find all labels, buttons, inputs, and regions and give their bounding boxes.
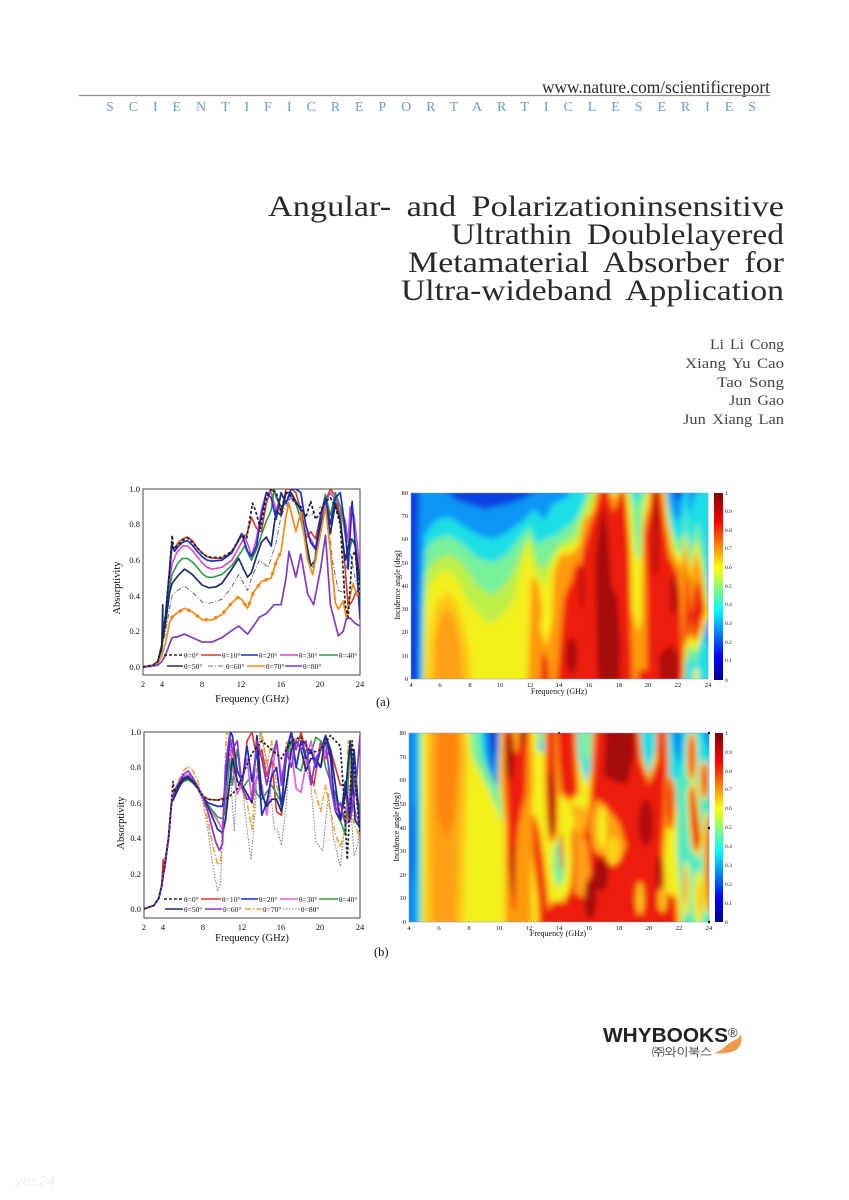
heatmap axis labels (b): Frequency (GHz) [530, 929, 586, 938]
axis labels (a): 8 [200, 679, 204, 689]
colorbar (b): 0.9 [725, 750, 732, 756]
heatmap axis labels (a): 4 [409, 682, 413, 689]
colorbar (b): 0 [725, 920, 728, 926]
legend (b): θ=70° [263, 905, 281, 914]
axis labels (b) [116, 727, 365, 944]
heatmap axis labels (b): 60 [400, 777, 406, 784]
heatmap axis labels (b): 22 [676, 925, 682, 932]
heatmap axis labels (b): 30 [400, 848, 406, 855]
colorbar (a): 0.1 [725, 658, 732, 664]
heatmap axis labels (b): 4 [407, 925, 411, 932]
line chart (b): absorptivity vs frequency [116, 727, 365, 944]
legend (b): θ=60° [223, 905, 241, 914]
legend (a): θ=20° [259, 651, 277, 660]
heatmap axis labels (a): 70 [402, 513, 408, 520]
axis labels (b): 20 [316, 922, 324, 932]
authors [683, 337, 785, 428]
caption (a): (a) [376, 695, 390, 709]
axis labels (b): Absorptivity [116, 796, 127, 850]
colorbar (a): 0.7 [725, 546, 732, 552]
heatmap axis labels (b): 10 [400, 895, 406, 902]
axis labels (b): 12 [238, 922, 246, 932]
heatmap axis labels (b): Incidence angle (deg) [392, 792, 401, 862]
colorbar (a): 1 [725, 491, 728, 497]
colorbar (b) [558, 731, 732, 926]
axis labels (a): 24 [356, 679, 365, 689]
axis labels (a): 12 [237, 679, 245, 689]
heatmap axis labels (b): 50 [400, 801, 406, 808]
axis labels (a): Absorptivity [112, 561, 123, 615]
heatmap (b): incidence angle vs frequency [14, 700, 742, 1190]
heatmap axis labels (a): 0 [405, 676, 408, 683]
colorbar (a): 0.3 [725, 621, 732, 627]
legend (a) [164, 651, 357, 671]
heatmap axis labels (b): 70 [400, 754, 406, 761]
heatmap axis labels (b): 20 [646, 925, 652, 932]
legend (a): θ=60° [226, 662, 244, 671]
colorbar (a): 0 [725, 678, 728, 684]
heatmap axis labels (a): 60 [402, 536, 408, 543]
colorbar (a): 0.6 [725, 565, 732, 571]
authors: Jun Gao [729, 393, 784, 409]
title: Angular- and Polarizationinsensitive [268, 190, 784, 223]
axis labels (b): 0.8 [130, 762, 141, 772]
legend (a): θ=0° [184, 651, 199, 660]
axis labels (a): 4 [160, 679, 165, 689]
heatmap axis labels (a): 24 [705, 682, 712, 689]
heatmap axis labels (a): 6 [438, 682, 442, 689]
legend (b): θ=20° [259, 895, 277, 904]
colorbar (a) [714, 491, 732, 684]
heatmap axis labels (a): 10 [402, 653, 408, 660]
legend (b): θ=40° [339, 895, 357, 904]
logo registered mark: ® [728, 1025, 738, 1040]
heatmap axis labels (b): 12 [526, 925, 532, 932]
heatmap axis labels (b): 6 [437, 925, 441, 932]
axis labels (b): 0.0 [130, 904, 141, 914]
heatmap axis labels (b): 16 [586, 925, 593, 932]
axis labels (b): Frequency (GHz) [215, 933, 289, 944]
heatmap axis labels (a): 16 [586, 682, 593, 689]
publisher logo [603, 1025, 742, 1059]
heatmap axis labels (a): 80 [402, 490, 408, 497]
colorbar (b): 0.2 [725, 882, 732, 888]
legend (b): θ=50° [184, 905, 202, 914]
colorbar (b): 0.7 [725, 787, 732, 793]
heatmap axis labels (a): 14 [556, 682, 563, 689]
colorbar (a): 0.2 [725, 640, 732, 646]
colorbar (b): 0.6 [725, 806, 732, 812]
caption (b): (b) [374, 945, 389, 959]
series curves (a) [143, 489, 360, 667]
logo wordmark: WHYBOOKS [603, 1025, 728, 1047]
legend (a): θ=30° [299, 651, 317, 660]
legend (a): θ=10° [222, 651, 240, 660]
axis labels (b): 0.2 [130, 869, 141, 879]
heatmap axis labels (a): Frequency (GHz) [531, 687, 587, 696]
legend (a): θ=80° [303, 662, 321, 671]
line chart (a): absorptivity vs frequency [112, 484, 365, 705]
heatmap axis labels (a): 20 [645, 682, 651, 689]
axis labels (b): 24 [356, 922, 365, 932]
axis labels (b): 16 [277, 922, 285, 932]
logo korean name: ㈜와이북스 [652, 1046, 712, 1059]
heatmap axis labels (a): 10 [497, 682, 503, 689]
axis labels (a): 0.8 [129, 519, 140, 529]
heatmap axis labels (b): 80 [400, 730, 406, 737]
heatmap axis labels (a) [393, 490, 712, 696]
authors: Li Li Cong [710, 337, 784, 353]
heatmap axis labels (a): 50 [402, 560, 408, 567]
axis labels (b): 0.4 [130, 833, 142, 843]
legend (a): θ=40° [339, 651, 357, 660]
authors: Jun Xiang Lan [683, 412, 785, 428]
heatmap axis labels (a): 18 [616, 682, 622, 689]
authors: Tao Song [717, 375, 784, 391]
heatmap axis labels (a): Incidence angle (deg) [393, 550, 402, 620]
heatmap axis labels (a): 40 [402, 583, 408, 590]
axis labels (b): 4 [161, 922, 166, 932]
colorbar (a): 0.4 [725, 602, 732, 608]
header: website url: www.nature.com/scientificreport [542, 77, 770, 97]
heatmap axis labels (a): 20 [402, 629, 408, 636]
title: Ultra-wideband Application [401, 274, 784, 307]
axis labels (a): 0.2 [129, 626, 140, 636]
axis labels (a): 1.0 [129, 484, 140, 494]
colorbar (b): 0.1 [725, 901, 732, 907]
axis labels (b): 1.0 [130, 727, 141, 737]
axis labels (a): 20 [316, 679, 324, 689]
colorbar (b): 0.3 [725, 863, 732, 869]
title: Ultrathin Doublelayered [451, 218, 784, 251]
authors: Xiang Yu Cao [685, 356, 784, 372]
heatmap axis labels (b): 14 [556, 925, 563, 932]
legend (b): θ=0° [184, 895, 199, 904]
axis labels (b): 0.6 [130, 798, 141, 808]
colorbar (a): 0.9 [725, 509, 732, 515]
heatmap axis labels (b): 0 [403, 919, 406, 926]
axis labels (a) [112, 484, 365, 705]
heatmap axis labels (b): 18 [616, 925, 622, 932]
heatmap axis labels (a): 30 [402, 606, 408, 613]
logo swoosh [714, 1034, 742, 1054]
legend (a): θ=50° [184, 662, 202, 671]
axis labels (b): 2 [142, 922, 146, 932]
colorbar (a): 0.8 [725, 528, 732, 534]
heatmap axis labels (a): 8 [468, 682, 472, 689]
colorbar (b): 0.8 [725, 769, 732, 775]
heatmap axis labels (a): 22 [675, 682, 681, 689]
watermark: yes24 [14, 1173, 55, 1190]
legend (b): θ=10° [222, 895, 240, 904]
legend (a): θ=70° [266, 662, 284, 671]
axis labels (a): 0.4 [129, 591, 141, 601]
axis labels (a): Frequency (GHz) [215, 694, 289, 705]
heatmap axis labels (b): 8 [467, 925, 471, 932]
title: Metamaterial Absorber for [408, 246, 784, 279]
heatmap axis labels (a): 12 [527, 682, 533, 689]
heatmap axis labels (b) [392, 730, 713, 938]
series curves (b) [144, 732, 360, 909]
legend (b): θ=30° [299, 895, 317, 904]
axis labels (a): 2 [141, 679, 145, 689]
heatmap axis labels (b): 40 [400, 825, 406, 832]
axis labels (a): 0.6 [129, 555, 140, 565]
axis labels (a): 0.0 [129, 662, 140, 672]
title [268, 190, 784, 307]
legend (b) [164, 895, 357, 914]
legend (b): θ=80° [301, 905, 319, 914]
heatmap axis labels (b): 20 [400, 872, 406, 879]
colorbar (b): 0.4 [725, 844, 732, 850]
colorbar (a): 0.5 [725, 584, 732, 590]
axis labels (a): 16 [277, 679, 285, 689]
axis labels (b): 8 [201, 922, 205, 932]
colorbar (b): 1 [725, 731, 728, 737]
colorbar (b): 0.5 [725, 825, 732, 831]
heatmap (a): incidence angle vs frequency [394, 491, 732, 696]
heatmap axis labels (b): 24 [706, 925, 713, 932]
header: series name: SCIENTIFICREPORTARTICLESERIES [106, 100, 756, 115]
heatmap axis labels (b): 10 [496, 925, 502, 932]
